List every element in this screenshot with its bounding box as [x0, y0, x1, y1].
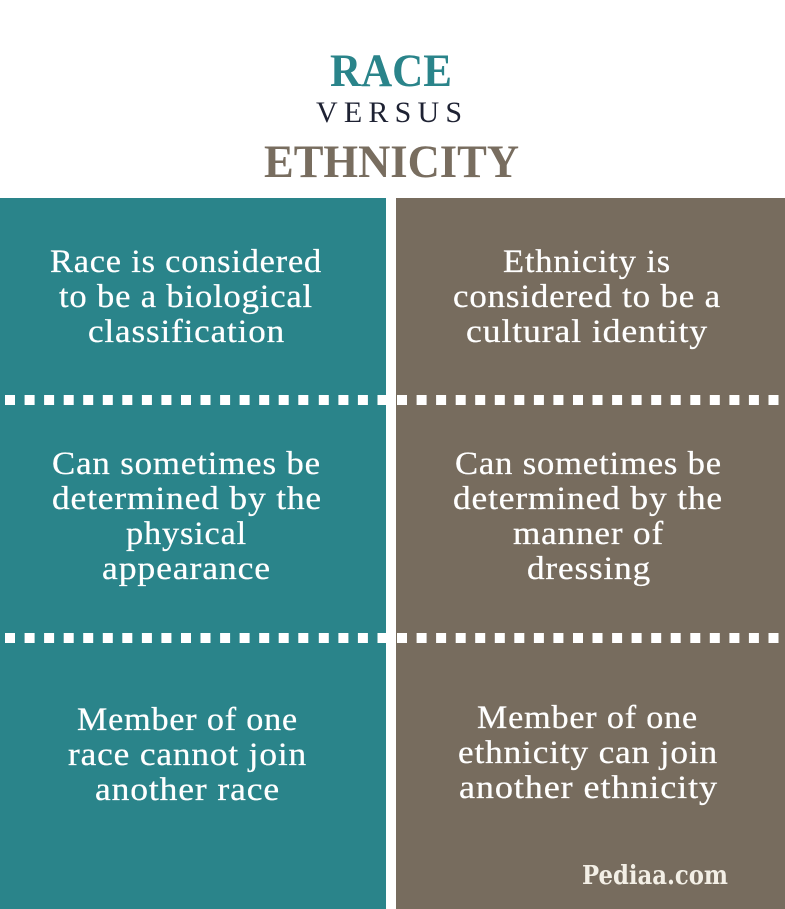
text: ethnicity row 3 [458, 700, 718, 806]
text: ethnicity row 3: ethnicity can join [458, 735, 718, 771]
text: race row 2: Can sometimes be [52, 446, 321, 482]
text: ethnicity row 3: another ethnicity [459, 770, 718, 806]
text: race row 3: another race [95, 772, 280, 808]
text: race row 2: determined by the [52, 481, 322, 517]
divider: upper dotted row [5, 395, 778, 405]
text: race row 2: appearance [102, 551, 271, 587]
text: ethnicity row 1: Ethnicity is [503, 244, 671, 280]
text: ethnicity row 2: determined by the [453, 481, 723, 517]
text: ethnicity row 3: Member of one [477, 700, 698, 736]
text: ethnicity row 2: manner of [513, 516, 664, 552]
text: race row 3: Member of one [77, 702, 298, 738]
watermark: Pediaa.com: Pediaa.com [582, 861, 728, 891]
text: race row 3: race cannot join [68, 737, 307, 773]
title: ETHNICITY [264, 136, 519, 188]
divider: lower dotted row [5, 633, 778, 643]
text: ethnicity row 1: considered to be a [453, 279, 721, 315]
text: race row 1: classification [88, 314, 285, 350]
title: RACE [330, 45, 452, 97]
text: race row 1 [50, 244, 322, 350]
text: ethnicity row 1 [453, 244, 721, 350]
text: ethnicity row 2 [453, 446, 723, 587]
text: ethnicity row 2: dressing [527, 551, 651, 587]
text: race row 1: Race is considered [50, 244, 322, 280]
panel: race [0, 198, 386, 909]
panel: ethnicity [396, 198, 785, 909]
text: race row 1: to be a biological [59, 279, 313, 315]
text: ethnicity row 2: Can sometimes be [455, 446, 722, 482]
text: race row 2 [52, 446, 322, 587]
text: race row 2: physical [126, 516, 247, 552]
title: VERSUS [316, 96, 462, 129]
text: race row 3 [68, 702, 307, 808]
text: ethnicity row 1: cultural identity [466, 314, 708, 350]
title [264, 45, 519, 188]
